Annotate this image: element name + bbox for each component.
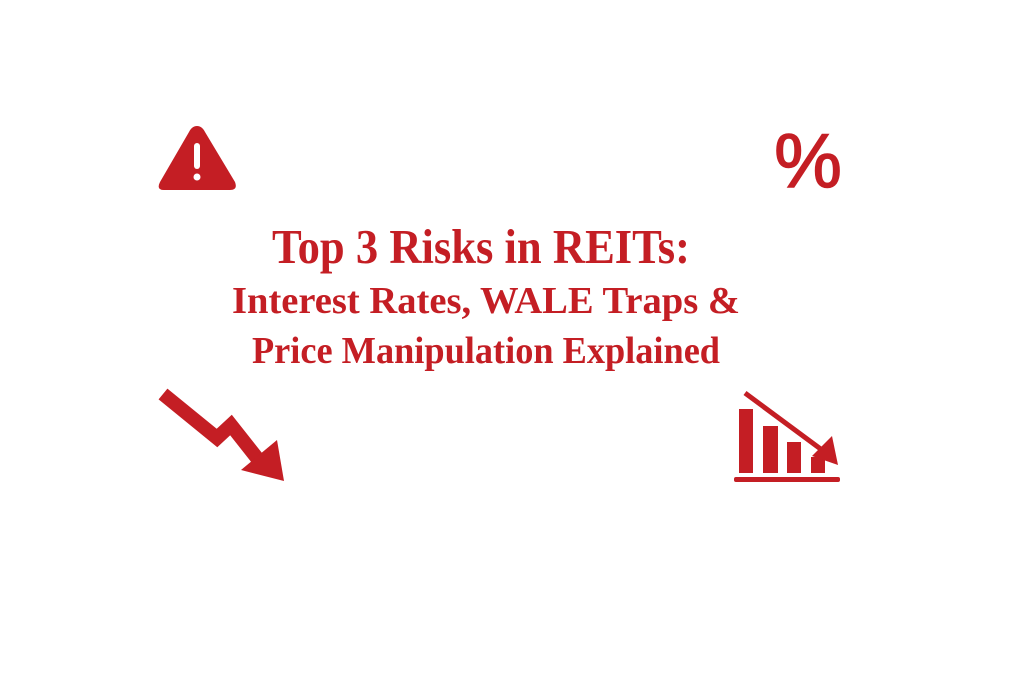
title: Price Manipulation Explained	[252, 330, 720, 372]
icon: percent sign: %	[774, 119, 842, 204]
title: Interest Rates, WALE Traps &	[232, 280, 740, 322]
icon: declining bar chart	[734, 393, 840, 482]
title: Top 3 Risks in REITs:	[272, 219, 690, 274]
title	[232, 219, 740, 372]
icon: warning triangle	[159, 126, 236, 190]
icon: zigzag down arrow	[163, 394, 284, 481]
